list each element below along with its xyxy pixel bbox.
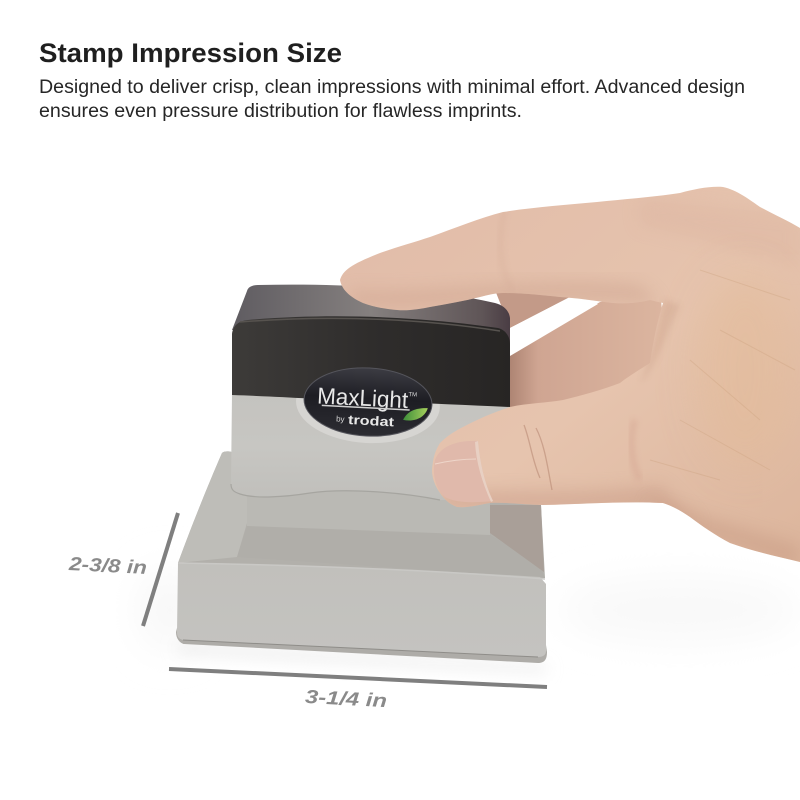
title: Stamp Impression Size: [39, 38, 342, 68]
logo badge: MaxLight by trodat: trodat: [348, 412, 395, 429]
logo badge: MaxLight by trodat: by: [336, 414, 345, 424]
base front face: [177, 563, 546, 657]
description text: [39, 77, 745, 122]
base lip: [176, 628, 547, 663]
finger shading: [350, 282, 660, 307]
left bevel: [178, 451, 247, 563]
logo badge: MaxLight by trodat: MaxLight: [317, 382, 409, 413]
description text: Designed to deliver crisp, clean impressions with minimal effort. Advanced design: [39, 77, 745, 98]
logo recess: [294, 361, 442, 447]
dimension line: height: [143, 513, 178, 626]
black cap: [232, 316, 510, 407]
dimension line: width: [169, 669, 547, 687]
thumbnail: [434, 441, 493, 502]
base top surface: [178, 451, 545, 578]
soft shadow under stamp and hand: [140, 570, 800, 672]
description text: ensures even pressure distribution for flawless imprints.: [39, 101, 522, 122]
knuckle wrinkles: [524, 425, 552, 490]
clear top window: [232, 285, 510, 345]
hand: [340, 187, 800, 570]
logo badge: MaxLight by trodat: TM: [408, 392, 417, 399]
logo badge: MaxLight by trodat: [302, 365, 434, 439]
dimension label: width: 3-1/4 in: [304, 687, 387, 712]
grey lower body: [231, 394, 510, 500]
front bevel band: [237, 526, 545, 578]
rear fingers behind stamp: [495, 290, 670, 408]
dimension label: height: 2-3/8 in: [67, 554, 147, 579]
stamp neck: [247, 480, 490, 535]
right rear corner: [490, 505, 544, 572]
stamp body: [231, 285, 510, 500]
stamp base: [176, 451, 547, 663]
